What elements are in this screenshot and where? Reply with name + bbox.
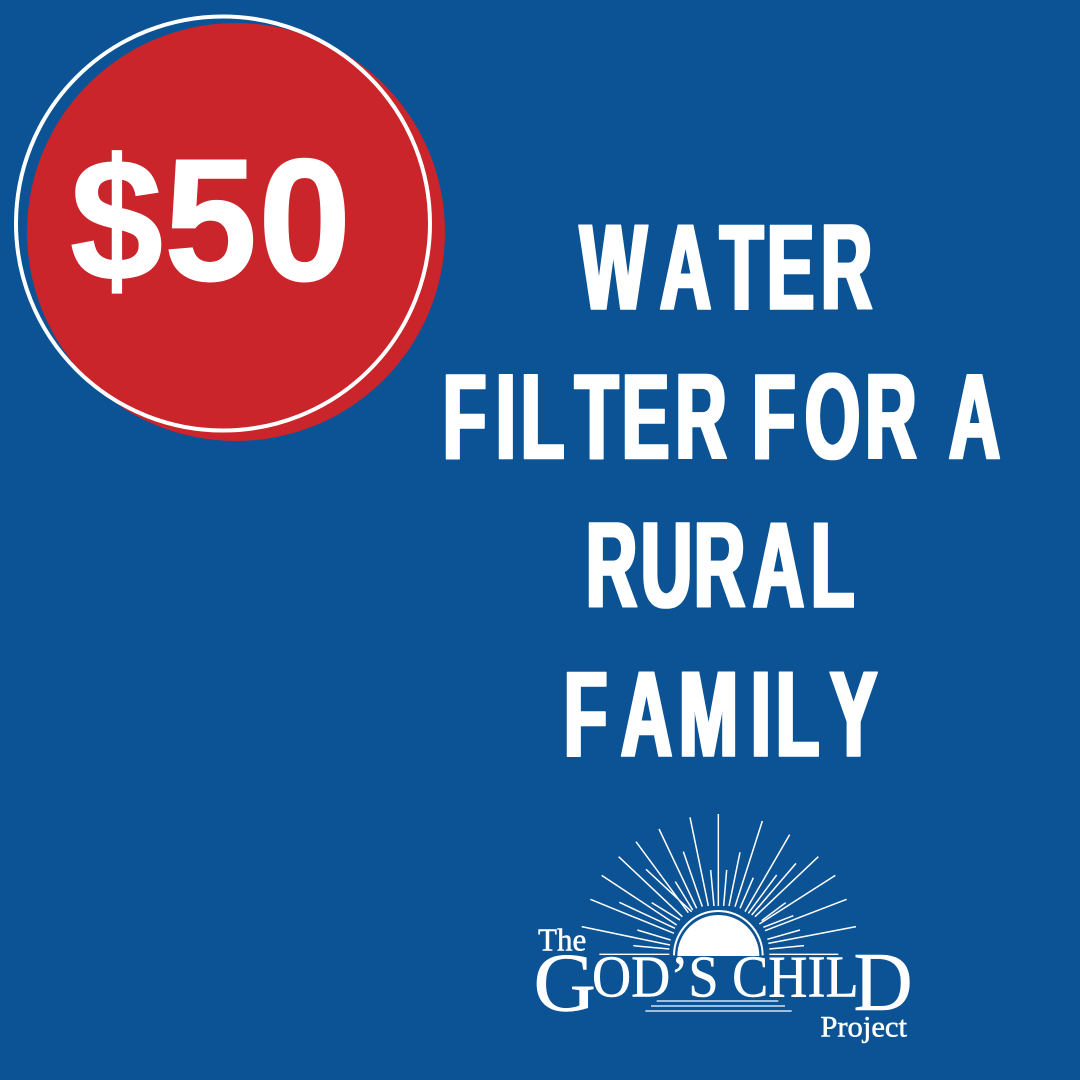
icon: sun rays (582, 814, 856, 949)
logo wordmark: OD’S CHIL (592, 944, 859, 1010)
heading (443, 200, 1000, 783)
heading line 1: WATER (580, 200, 872, 336)
logo wordmark (533, 923, 913, 1044)
logo wordmark: G (533, 937, 596, 1029)
logo: The God's Child Project (533, 814, 913, 1044)
white ring (16, 16, 430, 430)
heading line 3: RURAL (586, 498, 854, 634)
price badge (16, 16, 445, 441)
logo wordmark: The (538, 923, 586, 958)
logo base lines (645, 1001, 792, 1011)
heading line 2: FILTER FOR A (443, 350, 1000, 485)
red circle (27, 23, 445, 441)
icon: half sun (599, 911, 838, 956)
logo wordmark: Project (820, 1011, 908, 1044)
logo wordmark: D (853, 937, 913, 1029)
price text: $50 (70, 124, 351, 318)
heading line 4: FAMILY (564, 647, 877, 783)
